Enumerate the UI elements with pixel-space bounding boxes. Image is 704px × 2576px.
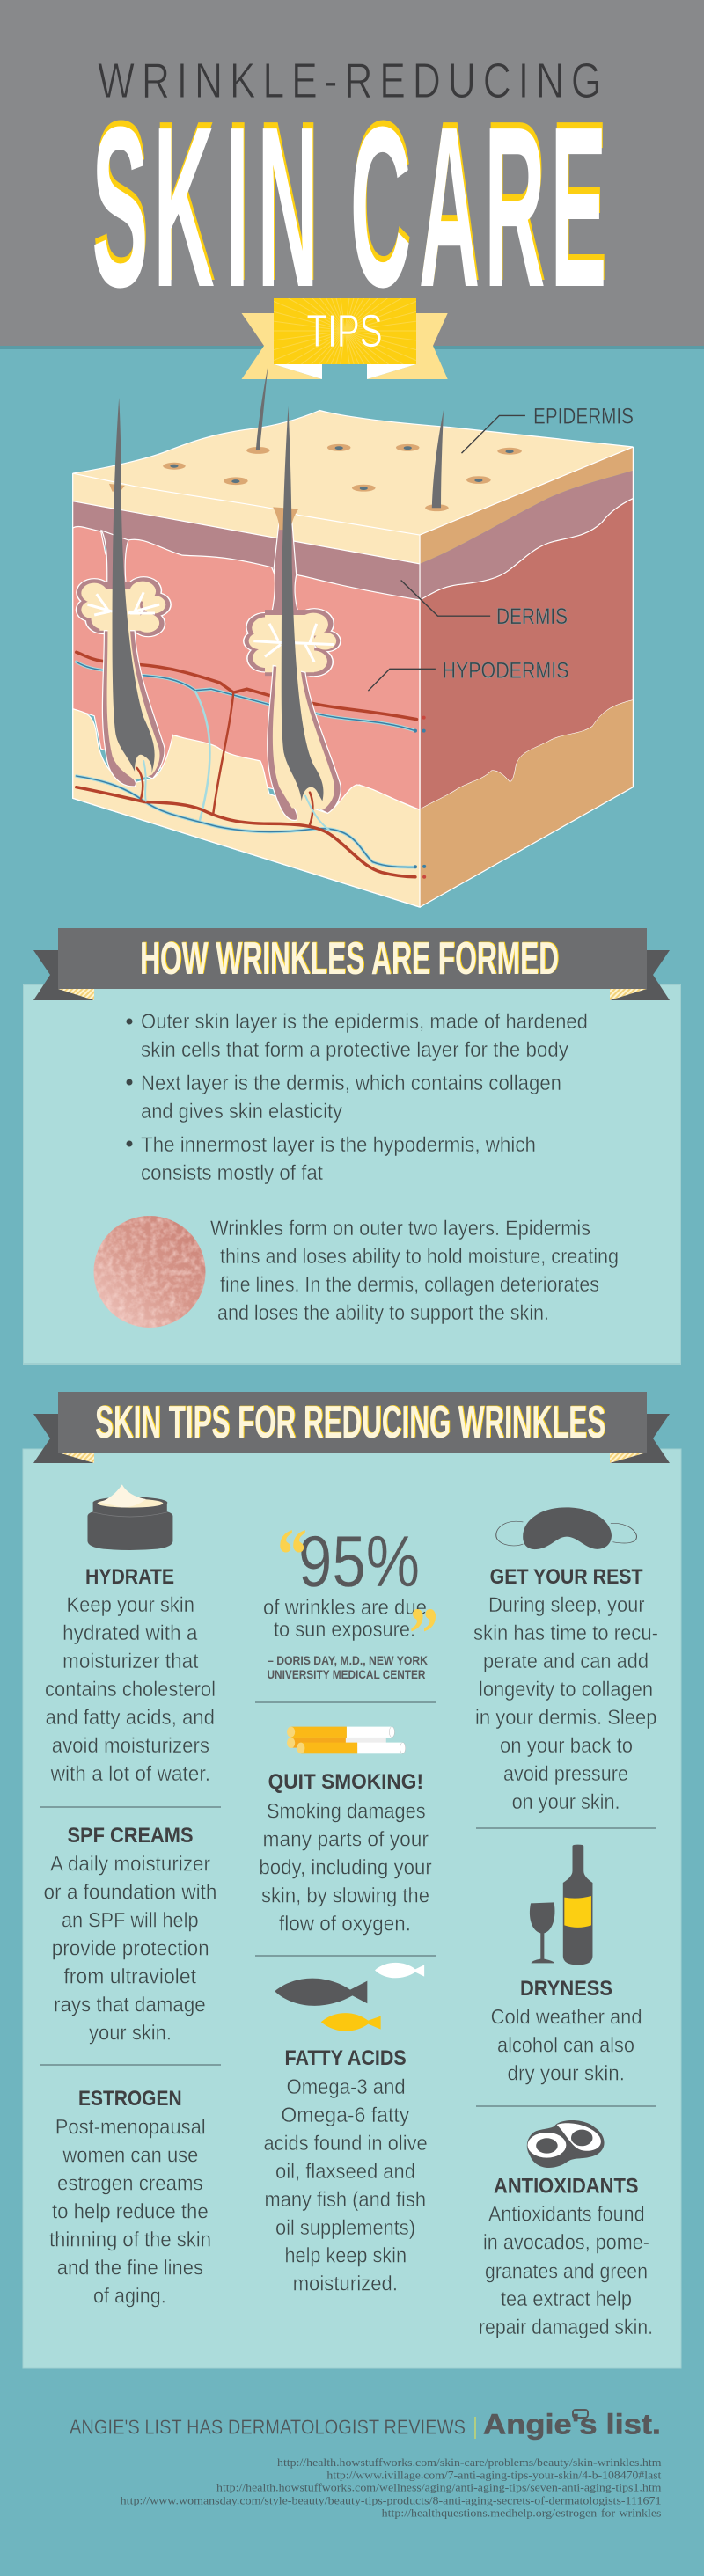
right fat layer <box>420 700 633 907</box>
tip: get your rest: avoid pressure <box>503 1762 628 1786</box>
tip: spf creams: provide protection <box>52 1937 209 1961</box>
tip: estrogen: Post-menopausal <box>55 2116 206 2140</box>
tip: get your rest: on your skin. <box>512 1790 620 1814</box>
tip: fatty acids: Omega-3 and <box>287 2075 406 2099</box>
tip: fatty acids <box>264 2046 428 2296</box>
tip: fatty acids: oil supplements) <box>275 2216 415 2240</box>
tip: quit smoking: QUIT SMOKING! <box>268 1770 423 1794</box>
tip: antioxidants: ANTIOXIDANTS <box>494 2175 639 2199</box>
bullet list: The innermost layer is the hypodermis, which <box>141 1133 536 1157</box>
tip: hydrate: HYDRATE <box>85 1565 174 1589</box>
footer call to action: ANGIE'S LIST HAS DERMATOLOGIST REVIEWS <box>70 2416 466 2439</box>
hypodermis front <box>73 526 420 809</box>
tip: spf creams: A daily moisturizer <box>50 1853 210 1876</box>
fat layer front <box>73 709 420 907</box>
tip: estrogen: women can use <box>62 2144 198 2168</box>
source links <box>121 2455 662 2520</box>
tip: antioxidants: Antioxidants found <box>488 2203 645 2227</box>
capillaries <box>137 761 330 831</box>
icon: cream jar <box>87 1484 172 1550</box>
bullet list: and gives skin elasticity <box>141 1100 342 1123</box>
tip: get your rest: GET YOUR REST <box>490 1565 643 1589</box>
stat: 95 percent quote: ” <box>409 1593 438 1675</box>
tip: antioxidants <box>479 2175 653 2339</box>
panel: how wrinkles are formed <box>23 984 681 1365</box>
tip: quit smoking: flow of oxygen. <box>279 1912 411 1936</box>
tip: hydrate <box>45 1565 216 1786</box>
tip: fatty acids: oil, flaxseed and <box>275 2160 415 2184</box>
tip: spf creams: an SPF will help <box>62 1909 199 1933</box>
tip: spf creams: rays that damage <box>54 1994 206 2017</box>
wrinkle explanation: fine lines. In the dermis, collagen deteriorates <box>220 1273 599 1297</box>
stat: 95 percent quote: to sun exposure. <box>274 1618 415 1642</box>
tip: estrogen: of aging. <box>93 2285 166 2309</box>
follicle two <box>243 507 341 820</box>
tip: estrogen: estrogen creams <box>57 2172 203 2196</box>
source links: http://www.womansday.com/style-beauty/beauty-tips-products/8-anti-aging-secrets-of-dermatologists-111671 <box>121 2494 662 2507</box>
wrinkle explanation: Wrinkles form on outer two layers. Epidermis <box>210 1217 590 1240</box>
ribbon: tips <box>241 298 448 379</box>
label: dermis: DERMIS <box>496 604 568 629</box>
tip: antioxidants: repair damaged skin. <box>479 2316 653 2339</box>
tip: hydrate: hydrated with a <box>62 1621 198 1645</box>
tip: dryness: alcohol can also <box>497 2034 634 2058</box>
tip: hydrate: contains cholesterol <box>45 1678 216 1701</box>
tip: hydrate: and fatty acids, and <box>46 1706 215 1730</box>
tip: get your rest: skin has time to recu- <box>473 1621 658 1645</box>
skin cross-section diagram <box>73 365 633 907</box>
source links: http://healthquestions.medhelp.org/estrogen-for-wrinkles <box>382 2506 662 2520</box>
tip: antioxidants: tea extract help <box>501 2287 632 2311</box>
tip: get your rest: perate and can add <box>483 1650 649 1673</box>
tip: dryness: DRYNESS <box>520 1977 612 2001</box>
tip: antioxidants: in avocados, pome- <box>483 2231 649 2255</box>
follicle one <box>76 531 172 787</box>
bullet list: Outer skin layer is the epidermis, made of hardened <box>141 1010 588 1034</box>
banner: skin tips <box>33 1392 670 1463</box>
right epidermis <box>420 447 633 564</box>
stat: 95 percent quote: UNIVERSITY MEDICAL CENTER <box>268 1667 426 1681</box>
logo: angie's list: Angie's list. <box>483 2409 661 2441</box>
tip: antioxidants: granates and green <box>485 2259 648 2283</box>
pores <box>109 444 522 511</box>
title: skin care: SKIN CARE <box>92 79 606 335</box>
tip: spf creams: from ultraviolet <box>63 1965 196 1989</box>
tips label: TIPS <box>306 306 382 357</box>
icon: wine bottle and glass <box>530 1845 592 1965</box>
tip: quit smoking: many parts of your <box>262 1827 429 1851</box>
vessel ends <box>414 716 426 879</box>
label: hypodermis: HYPODERMIS <box>442 658 568 683</box>
icon: cigarettes <box>287 1727 406 1753</box>
header band <box>0 0 704 349</box>
tip: get your rest: on your back to <box>500 1734 633 1758</box>
tip: dryness <box>491 1977 642 2086</box>
bullet list: skin cells that form a protective layer for the body <box>141 1038 568 1062</box>
tip: estrogen: to help reduce the <box>52 2200 209 2224</box>
panel: skin tips <box>23 1449 681 2368</box>
tip: fatty acids: acids found in olive <box>264 2132 428 2155</box>
source links: http://www.ivillage.com/7-anti-aging-tips-your-skin/4-b-108470#last <box>326 2469 662 2482</box>
stat: 95 percent quote: of wrinkles are due <box>263 1596 427 1620</box>
label lines <box>368 415 525 691</box>
bullet list: consists mostly of fat <box>141 1161 323 1185</box>
epidermis front <box>73 473 420 564</box>
tip: spf creams: or a foundation with <box>44 1881 216 1905</box>
stat: 95 percent quote: – DORIS DAY, M.D., NEW YORK <box>268 1653 428 1667</box>
icon: avocado <box>527 2120 605 2168</box>
tip: quit smoking <box>259 1770 432 1936</box>
subtitle: wrinkle-reducing: WRINKLE-REDUCING <box>98 53 609 108</box>
tip: hydrate: avoid moisturizers <box>52 1734 209 1758</box>
wrinkle explanation: and loses the ability to support the skin. <box>217 1301 549 1325</box>
tip: quit smoking: skin, by slowing the <box>261 1884 429 1907</box>
tip: fatty acids: help keep skin <box>285 2244 407 2268</box>
tip: fatty acids: FATTY ACIDS <box>285 2046 407 2070</box>
tip: spf creams <box>44 1824 216 2045</box>
tip: estrogen: ESTROGEN <box>78 2087 182 2111</box>
banner: how wrinkles are formed <box>33 928 670 1000</box>
source links: http://health.howstuffworks.com/skin-care/problems/beauty/skin-wrinkles.htm <box>277 2455 662 2469</box>
hairs <box>113 365 444 801</box>
stat: 95 percent quote: 95% <box>298 1520 420 1602</box>
tip: hydrate: Keep your skin <box>67 1593 194 1617</box>
tip: spf creams: your skin. <box>89 2022 172 2045</box>
tip: spf creams: SPF CREAMS <box>67 1824 194 1848</box>
source links: http://health.howstuffworks.com/wellness/aging/anti-aging-tips/seven-anti-aging-tips1.htm <box>216 2481 662 2494</box>
icon: fish <box>275 1963 424 2031</box>
tip: dryness: Cold weather and <box>491 2006 642 2030</box>
stat: 95 percent quote <box>263 1514 438 1681</box>
tip: estrogen: thinning of the skin <box>49 2228 211 2252</box>
stat: 95 percent quote: “ <box>277 1514 307 1596</box>
bullet list: Next layer is the dermis, which contains collagen <box>141 1072 561 1095</box>
tip: dryness: dry your skin. <box>507 2062 625 2086</box>
tip: fatty acids: Omega-6 fatty <box>281 2104 409 2127</box>
wrinkle explanation <box>210 1217 619 1325</box>
tip: quit smoking: body, including your <box>259 1855 432 1879</box>
top face <box>73 410 633 535</box>
tip: get your rest: longevity to collagen <box>479 1678 653 1701</box>
tip: hydrate: moisturizer that <box>62 1650 199 1673</box>
wrinkle explanation: thins and loses ability to hold moisture, creating <box>220 1245 619 1269</box>
icon: sleep mask <box>496 1507 636 1549</box>
dermis front <box>73 501 420 610</box>
tip: get your rest: in your dermis. Sleep <box>475 1706 656 1730</box>
tip: estrogen: and the fine lines <box>57 2257 203 2280</box>
right dermis <box>420 471 633 631</box>
tip: quit smoking: Smoking damages <box>267 1799 426 1823</box>
tip: get your rest: During sleep, your <box>488 1593 645 1617</box>
right hypodermis <box>420 499 633 809</box>
tip: get your rest <box>473 1565 658 1814</box>
skin photo <box>93 1216 206 1328</box>
bullet list <box>127 1010 588 1185</box>
label: epidermis: EPIDERMIS <box>533 405 634 429</box>
tip: estrogen <box>49 2087 211 2309</box>
tip: hydrate: with a lot of water. <box>50 1762 210 1786</box>
tip: fatty acids: moisturized. <box>293 2272 398 2296</box>
box edges <box>73 447 633 907</box>
tip: fatty acids: many fish (and fish <box>264 2188 426 2212</box>
blood vessels <box>77 652 416 877</box>
